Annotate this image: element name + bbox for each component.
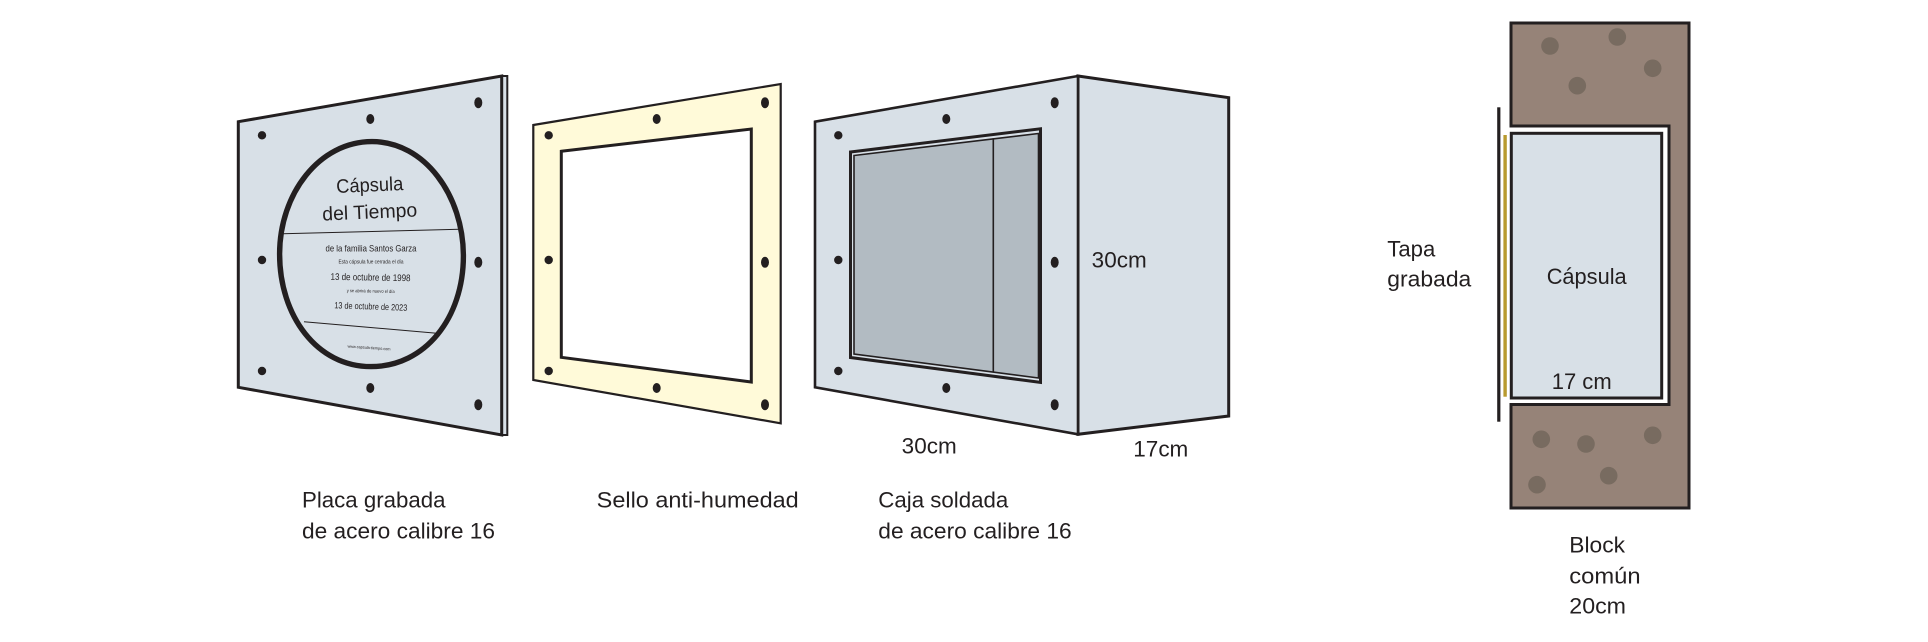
label: engraved lid: Tapa <box>1387 237 1436 262</box>
plate title: Cápsula <box>336 173 404 198</box>
engraved divider lines <box>283 229 459 333</box>
icon: plate screw holes <box>258 97 482 410</box>
panel: anti-humidity seal <box>533 84 781 423</box>
box opening frame <box>850 129 1040 382</box>
label: common block <box>1569 532 1641 618</box>
plate inscription: de la familia Santos Garza <box>326 244 417 254</box>
plate edge thickness <box>502 76 507 435</box>
plate inscription: Esta cápsula fue cerrada el día <box>338 260 404 266</box>
label: capsule: Cápsula <box>1547 264 1627 289</box>
plate inscription: 13 de octubre de 1998 <box>330 272 411 284</box>
dimension: capsule depth: 17 cm <box>1552 369 1612 394</box>
seal frame <box>533 84 781 423</box>
label: engraved plate <box>302 487 495 543</box>
label: welded box <box>878 487 1072 543</box>
plate title <box>322 173 418 226</box>
dimension: height: 30cm <box>1092 247 1147 272</box>
gold seal <box>1503 135 1507 397</box>
label: engraved plate: de acero calibre 16 <box>302 518 495 543</box>
label: seal: Sello anti-humedad <box>597 487 799 512</box>
label: engraved lid: grabada <box>1387 267 1472 292</box>
box opening interior <box>854 134 1038 378</box>
plate inscription <box>326 244 417 352</box>
box front face <box>815 76 1078 434</box>
panel: engraved plate <box>238 76 507 435</box>
seal inner opening <box>561 129 751 382</box>
common block wall <box>1511 23 1689 508</box>
label: common block: Block <box>1569 532 1626 557</box>
panel: wall cross-section <box>1497 23 1689 508</box>
plate face <box>238 76 502 435</box>
plate inscription: y se abrirá de nuevo el día <box>347 288 395 294</box>
label: engraved lid <box>1387 237 1472 292</box>
box side face <box>1078 76 1229 434</box>
dimension: width: 30cm <box>902 433 957 458</box>
panel: welded box <box>815 76 1229 434</box>
box inner edge <box>992 138 994 372</box>
capsule in section <box>1511 133 1662 398</box>
icon: box holes <box>834 97 1059 410</box>
engraved lid <box>1497 107 1500 422</box>
label: welded box: de acero calibre 16 <box>878 518 1072 543</box>
label: engraved plate: Placa grabada <box>302 487 446 512</box>
plate title: del Tiempo <box>322 199 418 226</box>
label: common block: común <box>1569 563 1641 588</box>
dimension: depth: 17cm <box>1133 437 1188 462</box>
label: welded box: Caja soldada <box>878 487 1009 512</box>
label: common block: 20cm <box>1569 593 1626 618</box>
plate inscription: 13 de octubre de 2023 <box>334 300 407 313</box>
icon: seal holes <box>544 97 769 410</box>
engraved circle <box>280 142 463 367</box>
plate inscription: www.capsula-tiempo.com <box>347 344 391 352</box>
block aggregate dots <box>1528 28 1661 494</box>
